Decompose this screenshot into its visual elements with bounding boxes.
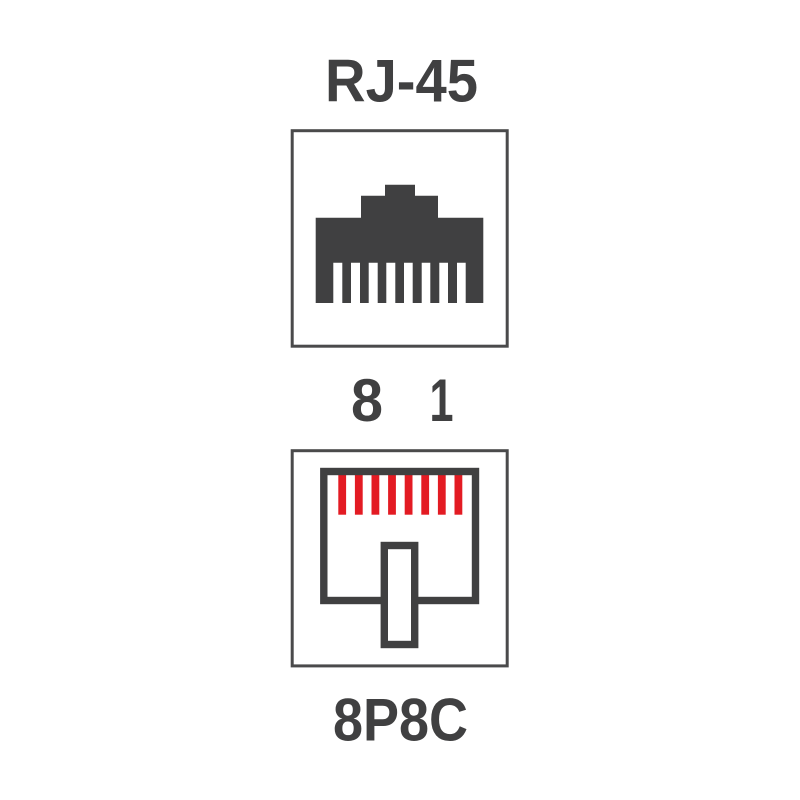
icon: jack socket silhouette	[316, 185, 483, 303]
icon: plug contacts	[338, 475, 462, 515]
label: pin 8: 8	[351, 367, 383, 434]
pin number labels	[351, 367, 454, 434]
panel: 8P8C plug	[292, 451, 507, 666]
label: 8P8C: 8P8C	[333, 686, 468, 754]
panel frame	[292, 451, 507, 666]
icon: plug body outline	[324, 472, 476, 600]
panel: RJ-45 jack	[292, 131, 507, 346]
panel frame	[292, 131, 507, 346]
title: RJ-45: RJ-45	[325, 48, 478, 114]
label: pin 1: 1	[430, 367, 454, 434]
icon: plug latch tab	[384, 546, 415, 644]
